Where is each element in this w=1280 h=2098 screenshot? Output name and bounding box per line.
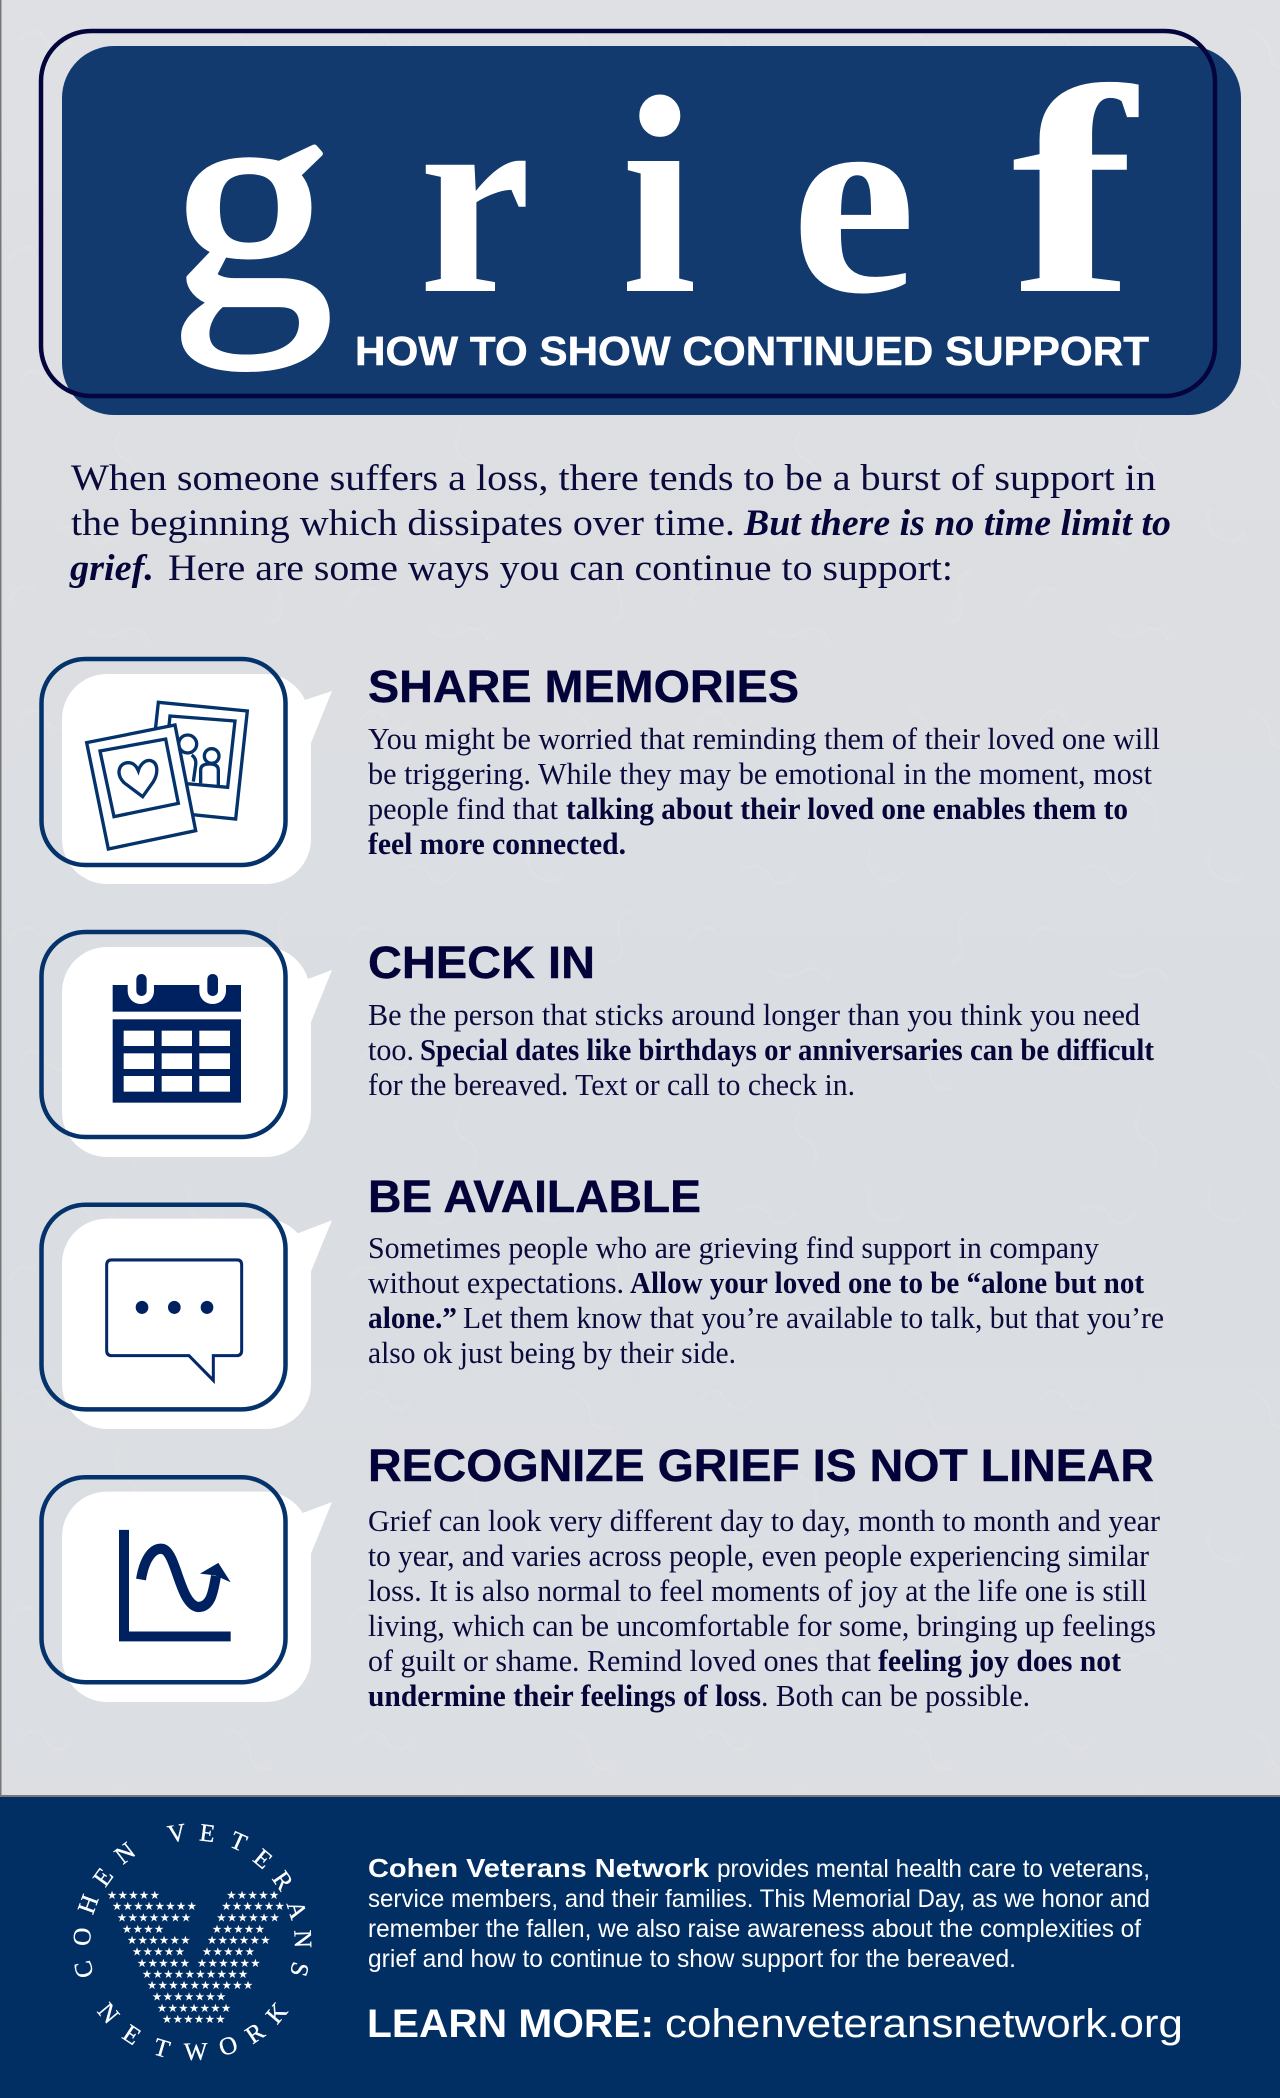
text: about Cohen Veterans Network: remember the fallen, we also raise awareness about the complexities of [368, 1915, 1141, 1943]
text: about Cohen Veterans Network: provides mental health care to veterans, [717, 1855, 1150, 1883]
call to action: learn more [367, 2002, 1183, 2046]
text: recognize grief body: of guilt or shame. Remind loved ones that [368, 1643, 871, 1678]
text: recognize grief body: undermine their feelings of loss [368, 1678, 761, 1713]
logo ring text: Network: R [241, 2018, 270, 2050]
logo: star V: ★★★★★★ [221, 1899, 285, 1913]
text: recognize grief body: loss. It is also normal to feel moments of joy at the life one is still [368, 1573, 1147, 1608]
title: grief: e [791, 47, 916, 351]
text: check in body: Be the person that sticks around longer than you think you need [368, 997, 1140, 1032]
logo: star V: ★★★★★★★ [157, 2001, 232, 2015]
logo: star V [107, 1888, 285, 2026]
text: be available body: Sometimes people who are grieving find support in company [368, 1230, 1099, 1265]
call to action: learn more: LEARN MORE: [367, 2002, 654, 2046]
logo ring text: Network: N [92, 1998, 124, 2029]
logo: star V: ★★★★★ [212, 1922, 265, 1936]
logo ring text: Cohen Veterans: T [226, 1827, 251, 1858]
panel: check in icon bubble [42, 932, 332, 1157]
intro paragraph: When someone suffers a loss, there tends to be a burst of support in [71, 458, 1156, 499]
icon: calendar [113, 973, 241, 1103]
logo ring text: Cohen Veterans: A [281, 1897, 312, 1923]
text: check in body: too. [368, 1032, 414, 1067]
title: grief: f [1011, 26, 1139, 355]
title: grief: r [419, 47, 531, 351]
logo ring text: Network [92, 1998, 293, 2066]
text: share memories body: be triggering. While they may be emotional in the moment, most [368, 756, 1152, 791]
logo: star V: ★★★★★★★ [117, 1910, 192, 1924]
logo ring text: Network: K [261, 1998, 293, 2029]
text: recognize grief body [368, 1503, 1161, 1713]
panel: grief not linear icon bubble [42, 1477, 332, 1702]
logo: star V: ★★★★★ [107, 1888, 160, 1902]
text: check in body: Special dates like birthdays or anniversaries can be difficult [420, 1032, 1155, 1067]
logo: star V: ★★★★★★★★★★ [142, 1967, 249, 1981]
logo: star V: ★★★★★★ [162, 2012, 226, 2026]
logo ring text: Cohen Veterans: C [69, 1958, 100, 1981]
panel: be available icon bubble [42, 1205, 332, 1429]
text: be available body: alone.” [368, 1300, 457, 1335]
text: recognize grief body: Grief can look very different day to day, month to month and year [368, 1503, 1161, 1538]
text: be available body: Let them know that you’re available to talk, but that you’re [463, 1300, 1164, 1335]
logo ring text: Network: E [118, 2020, 145, 2051]
logo: star V: ★★★★★★★ [152, 1989, 227, 2003]
logo ring text: Network: T [150, 2034, 173, 2064]
text: share memories body [368, 721, 1160, 861]
logo: star V: ★★★★★ [137, 1956, 190, 1970]
text: share memories body: talking about their loved one enables them to [566, 791, 1128, 826]
panel: footer [0, 1795, 1280, 2098]
logo: star V: ★★★★★★ [207, 1933, 271, 1947]
logo: star V: ★★★★★ [202, 1944, 255, 1958]
text: about Cohen Veterans Network: grief and how to continue to show support for the bereaved. [368, 1945, 1016, 1973]
panel: title banner [41, 26, 1241, 415]
text: recognize grief body: living, which can be uncomfortable for some, bringing up feelings [368, 1608, 1156, 1643]
text: share memories body: people find that [368, 791, 558, 826]
intro paragraph: But there is no time limit to [743, 503, 1171, 544]
title: grief [170, 26, 1139, 370]
logo ring text: Cohen Veterans: S [284, 1959, 314, 1979]
icon: chat bubble with dots [107, 1260, 242, 1380]
text: recognize grief body: to year, and varies across people, even people experiencing similar [368, 1538, 1150, 1573]
logo: star V: ★★★★★★★★★★ [147, 1978, 254, 1992]
text: check in body: for the bereaved. Text or call to check in. [368, 1067, 855, 1102]
logo ring text: Cohen Veterans: N [288, 1930, 316, 1949]
text: share memories body: You might be worried that reminding them of their loved one will [368, 721, 1160, 756]
heading: be available: BE AVAILABLE [368, 1171, 701, 1222]
text: about Cohen Veterans Network: Cohen Veterans Network [368, 1853, 710, 1883]
intro paragraph: the beginning which dissipates over time. [71, 503, 735, 544]
logo ring text: Network: O [216, 2031, 241, 2062]
text: be available body: also ok just being by their side. [368, 1335, 736, 1370]
logo ring text: Cohen Veterans: V [166, 1819, 188, 1849]
logo ring text: Cohen Veterans [69, 1819, 316, 1981]
logo: star V: ★★★★★★ [216, 1910, 280, 1924]
logo: star V: ★★★★★ [132, 1944, 185, 1958]
logo ring text: Cohen Veterans: N [110, 1837, 141, 1870]
logo: star V: ★★★★★★ [127, 1933, 191, 1947]
title: grief: g [170, 33, 333, 370]
logo ring text: Cohen Veterans: E [198, 1819, 217, 1848]
logo: star V: ★★★★★★ [197, 1956, 261, 1970]
text: be available body [368, 1230, 1164, 1370]
subtitle: HOW TO SHOW CONTINUED SUPPORT [355, 328, 1149, 374]
icon: polaroid photos [87, 702, 247, 849]
logo: star V: ★★★★★★★★ [112, 1899, 197, 1913]
text: check in body [368, 997, 1155, 1102]
intro paragraph [69, 458, 1171, 589]
heading: share memories: SHARE MEMORIES [368, 661, 799, 712]
text: about Cohen Veterans Network: service members, and their families. This Memorial Day, as we honor and [368, 1885, 1150, 1913]
text: share memories body: feel more connected. [368, 826, 626, 861]
text: recognize grief body: . Both can be possible. [761, 1678, 1030, 1713]
text: about Cohen Veterans Network [368, 1853, 1150, 1973]
logo: star V: ★★★★ [122, 1922, 165, 1936]
text: recognize grief body: feeling joy does not [878, 1643, 1122, 1678]
intro paragraph: Here are some ways you can continue to support: [168, 548, 953, 589]
icon: wavy line chart [119, 1530, 231, 1641]
logo ring text: Cohen Veterans: H [73, 1891, 105, 1918]
logo ring text: Network: W [184, 2038, 208, 2066]
heading: recognize grief is not linear: RECOGNIZE GRIEF IS NOT LINEAR [368, 1440, 1154, 1491]
text: be available body: without expectations. [368, 1265, 624, 1300]
title: grief: i [621, 39, 697, 353]
logo: Cohen Veterans Network [69, 1819, 316, 2066]
logo ring text: Cohen Veterans: E [248, 1844, 277, 1875]
logo ring text: Cohen Veterans: R [266, 1866, 298, 1896]
heading: check in: CHECK IN [368, 937, 595, 988]
intro paragraph: grief. [69, 548, 154, 589]
panel: share memories icon bubble [42, 659, 332, 884]
logo ring text: Cohen Veterans: O [69, 1927, 97, 1946]
text: be available body: Allow your loved one to be “alone but not [630, 1265, 1145, 1300]
logo: star V: ★★★★★ [226, 1888, 280, 1902]
logo ring text: Cohen Veterans: E [88, 1863, 119, 1892]
call to action: learn more: cohenveteransnetwork.org [665, 2002, 1183, 2046]
